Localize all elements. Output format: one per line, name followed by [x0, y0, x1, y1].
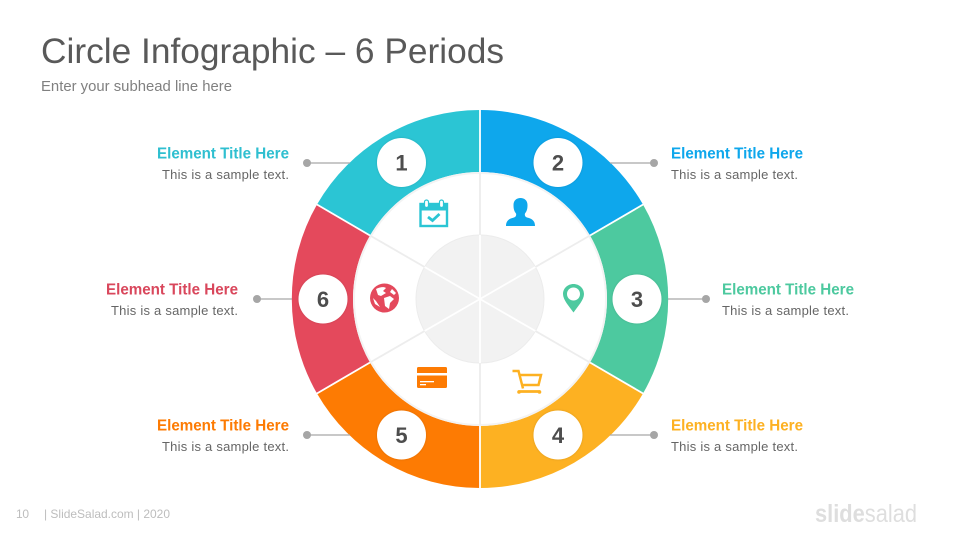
label 3: Element Title Here — [722, 282, 854, 298]
label 5 — [157, 418, 289, 454]
segment separators — [315, 108, 645, 490]
connector 1 — [303, 159, 350, 167]
connector 3 — [668, 295, 710, 303]
badge 1 — [377, 138, 426, 187]
segment 5 — [317, 362, 480, 488]
icon: map pin — [563, 284, 584, 312]
label 4: This is a sample text. — [671, 439, 798, 454]
inner white disc — [354, 173, 606, 425]
segment 2 — [480, 110, 643, 236]
footer page number: 10 — [16, 507, 29, 521]
logo wordmark: slidesalad — [815, 500, 917, 528]
label 5: This is a sample text. — [162, 439, 289, 454]
title: Circle Infographic – 6 Periods — [41, 32, 504, 71]
segment 3 — [590, 204, 668, 394]
label 6 — [106, 282, 238, 318]
label 3 — [722, 282, 854, 318]
center circle — [416, 235, 544, 363]
label 2 — [671, 146, 803, 182]
badge 5: 5 — [395, 423, 408, 448]
center spokes — [425, 235, 535, 363]
badge 6 — [298, 274, 348, 324]
icon: person — [506, 198, 535, 226]
badge 4: 4 — [552, 423, 565, 448]
inner dividers — [371, 173, 589, 425]
label 2: This is a sample text. — [671, 167, 798, 182]
badge 4 — [534, 410, 582, 460]
circle diagram — [292, 108, 668, 490]
icon: shopping cart — [512, 371, 541, 394]
icon: calendar — [420, 200, 447, 226]
badge 2 — [534, 138, 582, 187]
label 4: Element Title Here — [671, 418, 803, 434]
label 1: Element Title Here — [157, 146, 289, 162]
connector 6 — [253, 295, 292, 303]
subtitle: Enter your subhead line here — [41, 79, 232, 95]
badge 6: 6 — [317, 287, 329, 312]
segment 4 — [480, 362, 643, 488]
label 2: Element Title Here — [671, 146, 803, 162]
badge 3: 3 — [631, 287, 643, 312]
icon: credit card — [417, 367, 447, 388]
badge 3 — [612, 274, 662, 324]
segment 6 — [292, 204, 370, 394]
label 6: This is a sample text. — [111, 303, 238, 318]
badge 5 — [377, 410, 426, 460]
icon: globe — [370, 284, 399, 312]
connector 2 — [610, 159, 658, 167]
label 3: This is a sample text. — [722, 303, 849, 318]
badge 1: 1 — [395, 150, 408, 176]
connector 5 — [303, 431, 350, 439]
connector 4 — [610, 431, 658, 439]
badge 2: 2 — [552, 150, 564, 176]
footer text: | SlideSalad.com | 2020 — [44, 507, 170, 521]
label 5: Element Title Here — [157, 418, 289, 434]
label 4 — [671, 418, 803, 454]
segment 1 — [317, 110, 480, 236]
label 6: Element Title Here — [106, 282, 238, 298]
label 1: This is a sample text. — [162, 167, 289, 182]
label 1 — [157, 146, 289, 182]
